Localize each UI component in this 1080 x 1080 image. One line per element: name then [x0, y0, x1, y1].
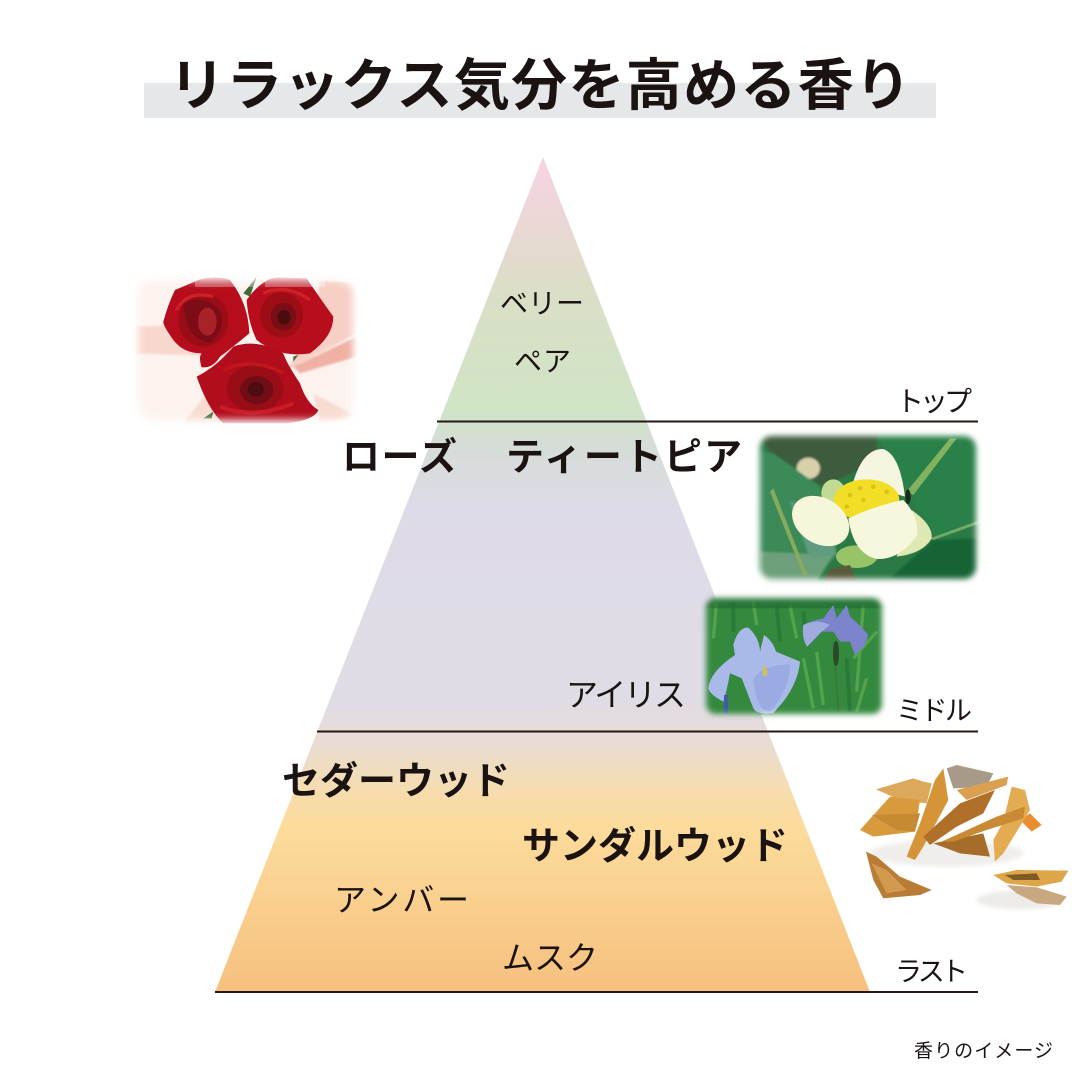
note: pear: ペア: [514, 346, 571, 377]
label: top: トップ: [896, 386, 972, 417]
title: リラックス気分を高める香り: [169, 54, 911, 117]
tier line: last: [215, 991, 978, 993]
note: berry: ベリー: [500, 288, 584, 319]
title band: [144, 83, 936, 118]
note: sandalwood: サンダルウッド: [522, 826, 788, 868]
note: tea tree pear: ティートピア: [506, 437, 742, 479]
tier line: middle: [317, 730, 978, 732]
pyramid: [215, 157, 870, 992]
note: rose: ローズ: [342, 436, 457, 479]
note: iris: アイリス: [566, 677, 686, 713]
note: musk: ムスク: [502, 940, 598, 976]
photo: iris: [700, 592, 888, 720]
photo: roses: [135, 277, 357, 424]
photo: tea flower: [750, 428, 985, 588]
caption: 香りのイメージ: [914, 1040, 1053, 1062]
label: middle: ミドル: [896, 696, 972, 726]
label: last: ラスト: [895, 957, 968, 987]
tier line: top: [437, 420, 978, 422]
note: amber: アンバー: [334, 882, 469, 918]
photo: sandalwood chips: [860, 765, 1068, 909]
note: cedarwood: セダーウッド: [282, 761, 510, 803]
